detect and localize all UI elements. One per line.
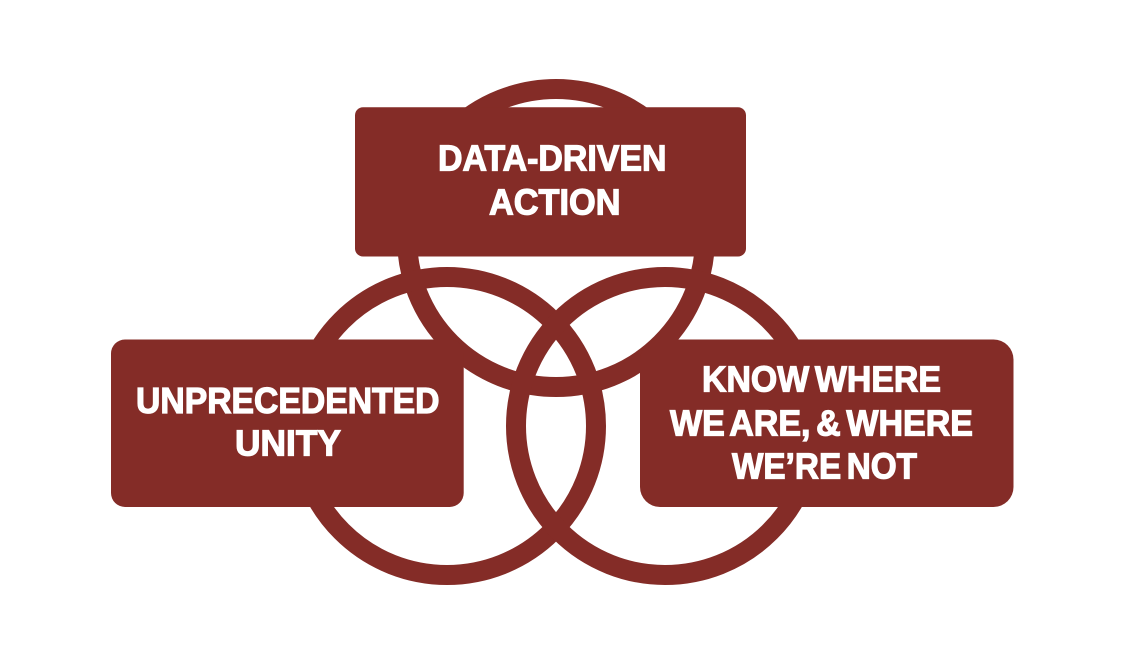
heading: know where we are: KNOW WHERE	[702, 358, 941, 400]
heading: data-driven action: ACTION	[489, 182, 620, 222]
heading: know where we are: WE ARE, & WHERE	[670, 402, 973, 444]
circle: left	[298, 277, 596, 575]
heading: unprecedented unity: UNPRECEDENTED	[136, 380, 440, 421]
panel: unprecedented unity	[111, 340, 464, 507]
panel: know where we are	[640, 340, 1014, 507]
heading: data-driven action: DATA-DRIVEN	[438, 138, 666, 178]
circle: right	[516, 277, 814, 575]
heading: data-driven action	[438, 138, 666, 222]
heading: unprecedented unity: UNITY	[235, 422, 341, 464]
panel: data-driven action	[355, 107, 746, 256]
heading: unprecedented unity	[136, 380, 440, 464]
circle: top	[407, 89, 705, 387]
heading: know where we are	[670, 358, 973, 486]
heading: know where we are: WE’RE NOT	[732, 446, 917, 486]
